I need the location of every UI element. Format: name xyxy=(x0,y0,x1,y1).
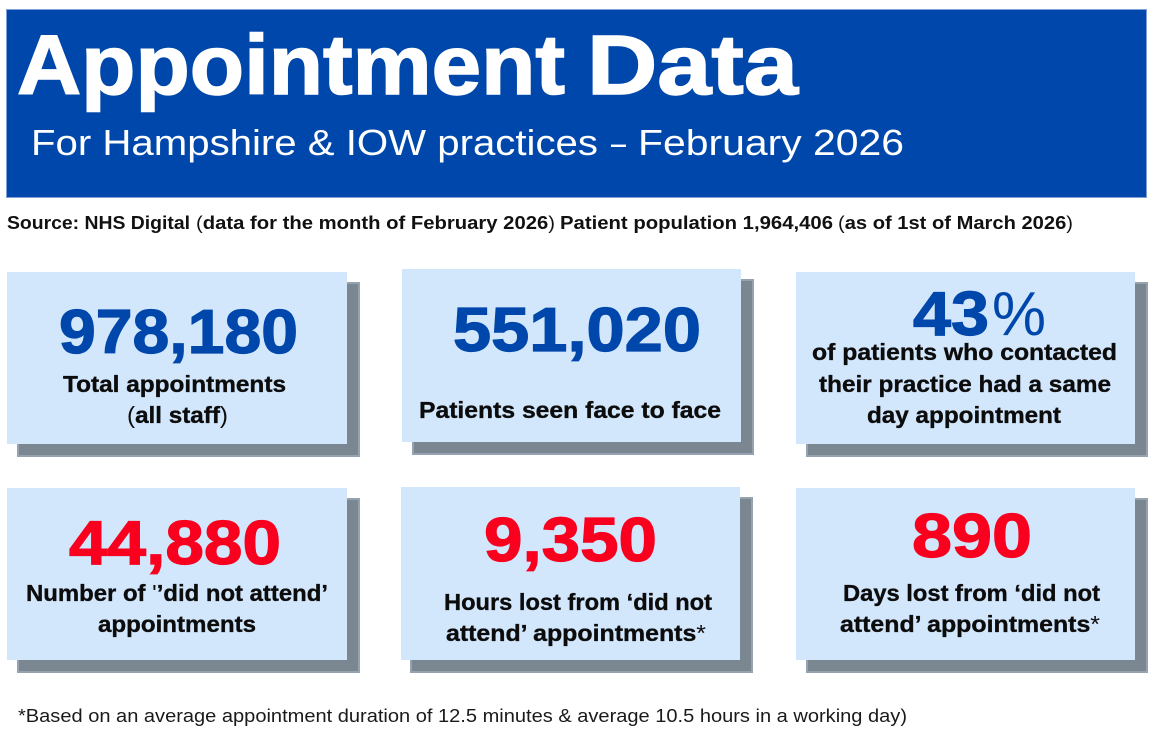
header banner xyxy=(6,10,1146,198)
panel: did not attend count xyxy=(7,488,359,672)
title: Appointment xyxy=(17,18,565,112)
value: 44,880: 44,880 xyxy=(69,509,281,578)
value: 43%: 43 xyxy=(913,280,989,349)
subtitle: For Hampshire & IOW practices xyxy=(31,122,598,163)
label: did not attend count: Number of '’did not attend’ xyxy=(26,580,328,606)
panel: hours lost xyxy=(401,487,752,672)
label: did not attend count xyxy=(26,580,328,637)
label: same day description: of patients who contacted xyxy=(812,339,1117,365)
label: hours lost xyxy=(444,589,712,646)
value: 43%: % xyxy=(992,280,1046,349)
panel: patients seen face to face xyxy=(402,269,753,454)
label: same day description: their practice had a same xyxy=(819,371,1111,397)
label: total appointments: Total appointments xyxy=(63,371,286,397)
value: 9,350: 9,350 xyxy=(484,506,657,575)
label: patients seen face to face: Patients seen face to face xyxy=(419,397,721,423)
label: hours lost: attend’ appointments * xyxy=(446,620,706,646)
panel: total appointments xyxy=(7,272,359,456)
subtitle: February 2026 xyxy=(638,122,904,163)
value: 890: 890 xyxy=(912,502,1032,571)
label: total appointments xyxy=(63,371,286,428)
value: 43% xyxy=(913,280,1046,349)
value: 978,180: 978,180 xyxy=(59,298,298,367)
label: hours lost: Hours lost from ‘did not xyxy=(444,589,712,615)
title: Data xyxy=(587,18,799,112)
label: days lost: attend’ appointments * xyxy=(840,611,1100,637)
label: days lost xyxy=(840,580,1100,637)
panel: same day appointments xyxy=(796,272,1147,456)
subtitle: – xyxy=(611,122,626,163)
source line: (as of 1st of March 2026 ) xyxy=(838,213,1073,233)
label: total appointments: (all staff) xyxy=(127,402,228,428)
panel: days lost xyxy=(796,488,1147,672)
label: did not attend count: appointments xyxy=(98,611,256,637)
footnote: *Based on an average appointment duration of 12.5 minutes & average 10.5 hours in a working day) xyxy=(18,706,907,726)
label: same day description: day appointment xyxy=(867,402,1061,428)
source line: Source: NHS Digital xyxy=(7,213,190,233)
source line: Patient population 1,964,406 xyxy=(560,213,833,233)
title xyxy=(17,18,799,112)
value: 551,020: 551,020 xyxy=(453,296,701,365)
source line xyxy=(7,213,1073,233)
source line: (data for the month of February 2026 ) xyxy=(196,213,555,233)
label: same day description xyxy=(812,339,1117,428)
subtitle xyxy=(31,122,904,163)
label: days lost: Days lost from ‘did not xyxy=(843,580,1100,606)
